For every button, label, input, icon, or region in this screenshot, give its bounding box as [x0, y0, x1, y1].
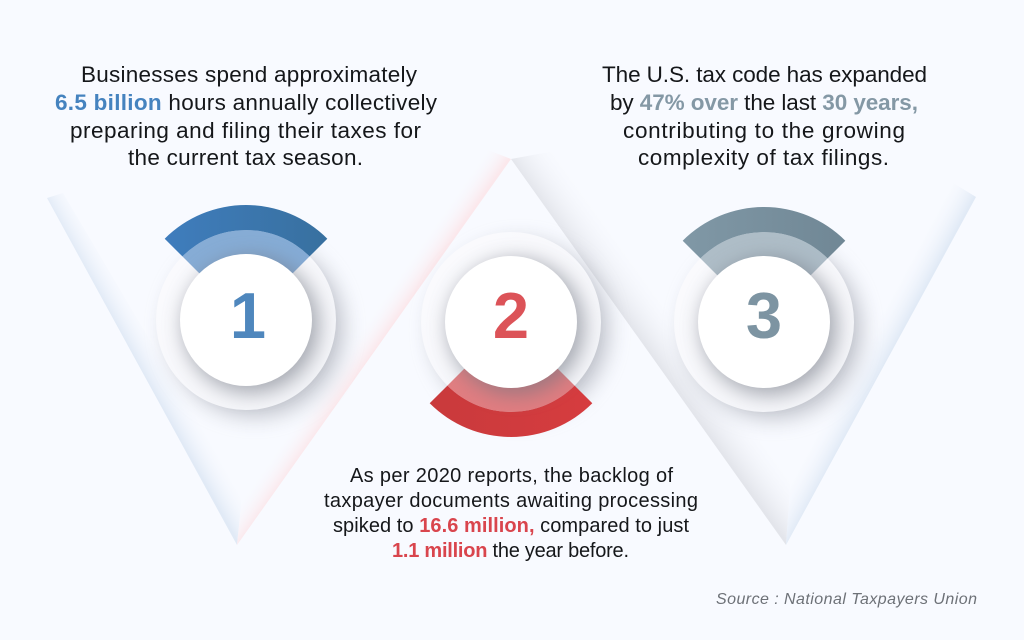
- text block: step 1: the current tax season.: [128, 145, 363, 170]
- arc: red outer: [430, 386, 592, 437]
- text block: step 2: spiked to 16.6 million, compared to just: [333, 515, 689, 537]
- arc: slate inner: [700, 232, 828, 278]
- ring shadow: [685, 242, 861, 418]
- arc: slate outer: [683, 207, 845, 258]
- inner circle: [180, 254, 312, 386]
- text block: step 3: [602, 62, 927, 170]
- panel: step 1 badge: [156, 205, 343, 416]
- arc: blue inner: [182, 230, 310, 276]
- arc: red inner: [447, 366, 575, 412]
- inner circle: [445, 256, 577, 388]
- panel: step 3 badge: [674, 207, 861, 418]
- text block: step 1: preparing and filing their taxes for: [70, 118, 422, 143]
- ring: [156, 230, 336, 410]
- text block: step 1: 6.5 billion hours annually collectively: [55, 90, 438, 115]
- number 2: 2: [493, 279, 529, 352]
- text block: step 3: by 47% over the last 30 years,: [610, 90, 918, 115]
- ring shadow: [167, 240, 343, 416]
- text block: step 1: [55, 62, 438, 170]
- ring: [421, 232, 601, 412]
- number 3: 3: [746, 279, 782, 352]
- inner circle shadow: [183, 257, 319, 393]
- panel: step 2 badge: [421, 232, 608, 437]
- inner circle shadow: [701, 259, 837, 395]
- ring shadow: [432, 242, 608, 418]
- text block: step 2: taxpayer documents awaiting processing: [324, 490, 698, 512]
- text block: step 2: [324, 465, 698, 562]
- text block: step 1: Businesses spend approximately: [81, 62, 418, 87]
- number 1: 1: [230, 279, 266, 352]
- inner circle shadow: [448, 259, 584, 395]
- zigzag V shapes: [47, 150, 976, 545]
- text block: step 3: The U.S. tax code has expanded: [602, 62, 927, 87]
- text block: step 2: 1.1 million the year before.: [392, 540, 629, 562]
- text block: step 3: complexity of tax filings.: [638, 145, 889, 170]
- source note: Source : National Taxpayers Union: [716, 591, 977, 608]
- arc: blue outer: [165, 205, 327, 256]
- ring: [674, 232, 854, 412]
- text block: step 2: As per 2020 reports, the backlog of: [350, 465, 673, 487]
- text block: step 3: contributing to the growing: [623, 118, 905, 143]
- inner circle: [698, 256, 830, 388]
